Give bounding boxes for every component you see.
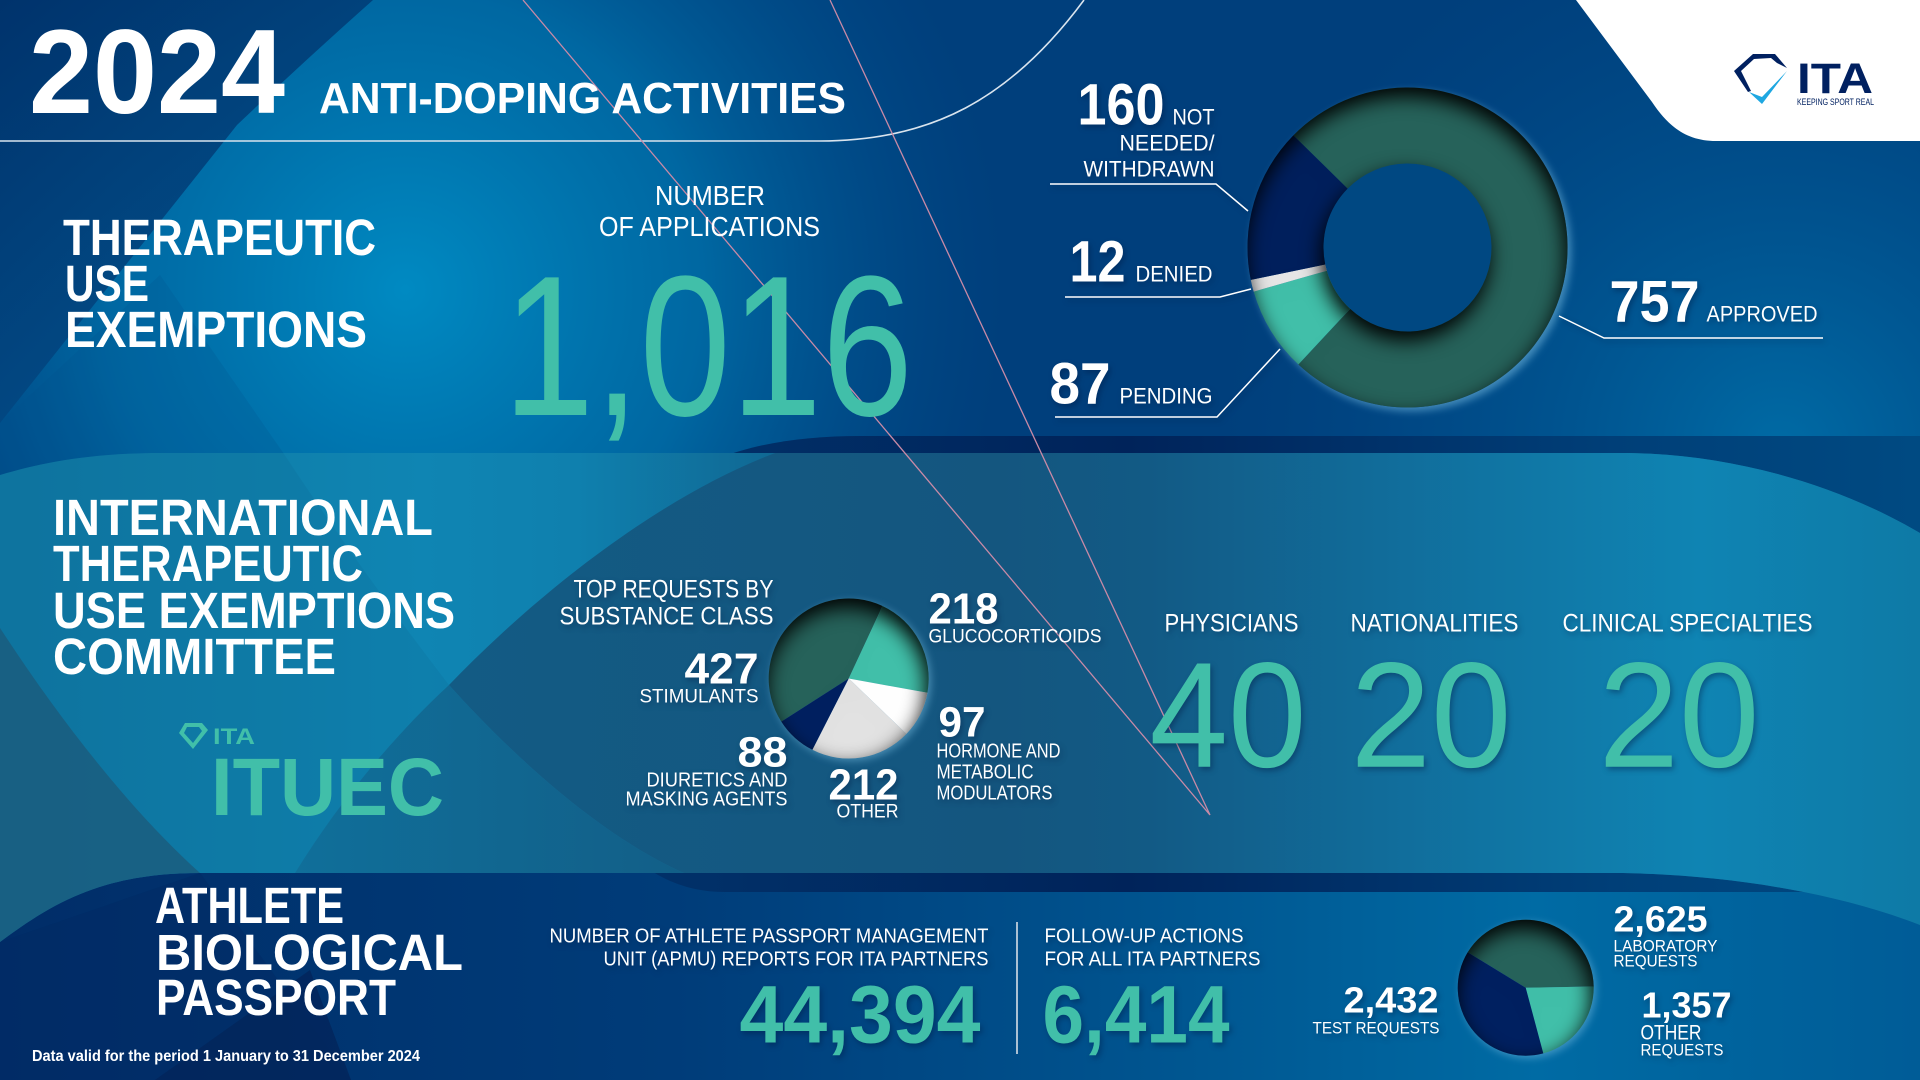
stat: clinical specialties: 20 bbox=[1598, 631, 1760, 799]
donut label: 87 pending: PENDING bbox=[1120, 384, 1212, 409]
pie chart: passport requests bbox=[1458, 920, 1596, 1058]
heading: ITUEC committee: INTERNATIONAL bbox=[53, 489, 433, 546]
donut label: 87 pending: 87 bbox=[1050, 352, 1110, 417]
ITA logo bbox=[1734, 54, 1874, 107]
donut label: 12 denied: DENIED bbox=[1136, 262, 1212, 287]
stat: follow-up actions bbox=[1042, 926, 1260, 1061]
pie label: other: 212 bbox=[828, 761, 898, 810]
pie heading: top requests: TOP REQUESTS BY bbox=[574, 576, 774, 604]
pie label: other requests bbox=[1640, 985, 1732, 1060]
decorative line: header rule with curve bbox=[0, 0, 1084, 141]
donut label: 160 not needed: NEEDED/ bbox=[1120, 131, 1215, 156]
donut label: 160 not needed: NOT bbox=[1172, 105, 1214, 130]
stat: number of applications: 1,016 bbox=[503, 235, 913, 458]
pie label: other: OTHER bbox=[836, 802, 898, 823]
donut label: 87 pending bbox=[1050, 349, 1280, 417]
stat: nationalities: 20 bbox=[1350, 631, 1512, 799]
pie label: diuretics: MASKING AGENTS bbox=[626, 789, 788, 811]
ITUEC logo: ITA bbox=[213, 724, 255, 749]
pie heading: top requests: SUBSTANCE CLASS bbox=[560, 603, 774, 631]
pie label: laboratory requests bbox=[1614, 899, 1718, 971]
donut label: 160 not needed: 160 bbox=[1078, 73, 1164, 138]
title bbox=[29, 5, 846, 139]
stat: nationalities: NATIONALITIES bbox=[1350, 610, 1518, 638]
pie label: hormone and metabolic modulators bbox=[936, 699, 1060, 805]
pie label: diuretics: DIURETICS AND bbox=[646, 770, 788, 792]
footnote: Data valid for the period 1 January to 31 December 2024 bbox=[32, 1048, 420, 1065]
donut label: 757 approved: 757 bbox=[1610, 270, 1700, 335]
stat: follow-up actions: 6,414 bbox=[1042, 970, 1230, 1061]
stat: clinical specialties bbox=[1562, 610, 1812, 799]
donut chart: TUE outcomes bbox=[1247, 88, 1571, 411]
pie label: stimulants: STIMULANTS bbox=[640, 687, 758, 708]
white logo corner bbox=[1576, 0, 1920, 141]
pie label: other requests: OTHER bbox=[1640, 1022, 1702, 1045]
stat: APMU reports: NUMBER OF ATHLETE PASSPORT MANAGEMENT bbox=[550, 926, 988, 948]
heading: athlete biological passport: BIOLOGICAL bbox=[156, 924, 463, 981]
donut label: 12 denied bbox=[1065, 230, 1251, 297]
heading: therapeutic use exemptions: EXEMPTIONS bbox=[65, 301, 367, 358]
pie label: other requests: 1,357 bbox=[1642, 985, 1732, 1026]
pie label: hormone and metabolic modulators: HORMONE AND bbox=[936, 741, 1060, 763]
pie label: hormone and metabolic modulators: MODULATORS bbox=[936, 783, 1052, 805]
pie chart: top requests by substance class bbox=[769, 599, 931, 761]
stat: number of applications bbox=[503, 180, 913, 458]
donut label: 160 not needed bbox=[1050, 73, 1248, 211]
title: ANTI-DOPING ACTIVITIES bbox=[319, 74, 846, 123]
stat: number of applications: OF APPLICATIONS bbox=[599, 211, 820, 242]
heading: ITUEC committee: COMMITTEE bbox=[53, 628, 336, 685]
heading: athlete biological passport bbox=[155, 877, 463, 1026]
heading: ITUEC committee bbox=[53, 489, 455, 685]
ITUEC logo: ITUEC bbox=[211, 742, 444, 833]
ITA logo: ITA bbox=[1797, 55, 1873, 103]
stat: physicians: 40 bbox=[1150, 631, 1306, 799]
pie label: stimulants: 427 bbox=[684, 645, 758, 694]
divider between APMU and follow-up bbox=[1016, 922, 1018, 1054]
heading: therapeutic use exemptions: THERAPEUTIC bbox=[63, 209, 376, 266]
stat: APMU reports: 44,394 bbox=[740, 970, 981, 1061]
pie label: laboratory requests: 2,625 bbox=[1614, 899, 1708, 940]
ITUEC logo bbox=[179, 723, 444, 833]
stat: follow-up actions: FOR ALL ITA PARTNERS bbox=[1044, 949, 1260, 971]
pie label: laboratory requests: REQUESTS bbox=[1614, 952, 1698, 971]
donut label: 12 denied: 12 bbox=[1070, 230, 1126, 295]
stat: APMU reports: UNIT (APMU) REPORTS FOR ITA PARTNERS bbox=[604, 949, 988, 971]
pie label: test requests: 2,432 bbox=[1344, 980, 1438, 1021]
pie label: glucocorticoids bbox=[928, 585, 1102, 648]
title: 2024 bbox=[29, 5, 285, 139]
pie label: diuretics: 88 bbox=[738, 729, 788, 777]
ITA logo: KEEPING SPORT REAL bbox=[1797, 97, 1874, 107]
heading: therapeutic use exemptions: USE bbox=[65, 255, 149, 312]
stat: physicians: PHYSICIANS bbox=[1164, 610, 1298, 638]
pie label: laboratory requests: LABORATORY bbox=[1614, 937, 1718, 956]
heading: ITUEC committee: THERAPEUTIC bbox=[53, 535, 363, 592]
donut label: 757 approved: APPROVED bbox=[1706, 302, 1818, 327]
stat: number of applications: NUMBER bbox=[655, 180, 765, 211]
pie label: glucocorticoids: GLUCOCORTICOIDS bbox=[928, 627, 1102, 648]
donut label: 757 approved bbox=[1559, 270, 1823, 338]
heading: ITUEC committee: USE EXEMPTIONS bbox=[53, 582, 455, 639]
pie label: diuretics bbox=[626, 729, 788, 811]
heading: athlete biological passport: ATHLETE bbox=[155, 877, 344, 934]
stat: APMU reports bbox=[550, 926, 988, 1061]
pie label: stimulants bbox=[640, 645, 758, 708]
heading: athlete biological passport: PASSPORT bbox=[156, 969, 396, 1026]
pie label: other requests: REQUESTS bbox=[1640, 1041, 1724, 1060]
pie heading: top requests bbox=[560, 576, 774, 631]
stat: follow-up actions: FOLLOW-UP ACTIONS bbox=[1044, 926, 1244, 948]
pie label: glucocorticoids: 218 bbox=[928, 585, 998, 634]
pie label: hormone and metabolic modulators: METABOLIC bbox=[936, 762, 1034, 784]
pie label: test requests: TEST REQUESTS bbox=[1312, 1019, 1440, 1038]
donut label: 160 not needed: WITHDRAWN bbox=[1084, 157, 1214, 182]
pink converging lines bbox=[523, 0, 1210, 815]
stat: clinical specialties: CLINICAL SPECIALTIES bbox=[1562, 610, 1812, 638]
pie label: test requests bbox=[1312, 980, 1440, 1038]
heading: therapeutic use exemptions bbox=[63, 209, 376, 358]
pie label: hormone and metabolic modulators: 97 bbox=[938, 699, 986, 747]
